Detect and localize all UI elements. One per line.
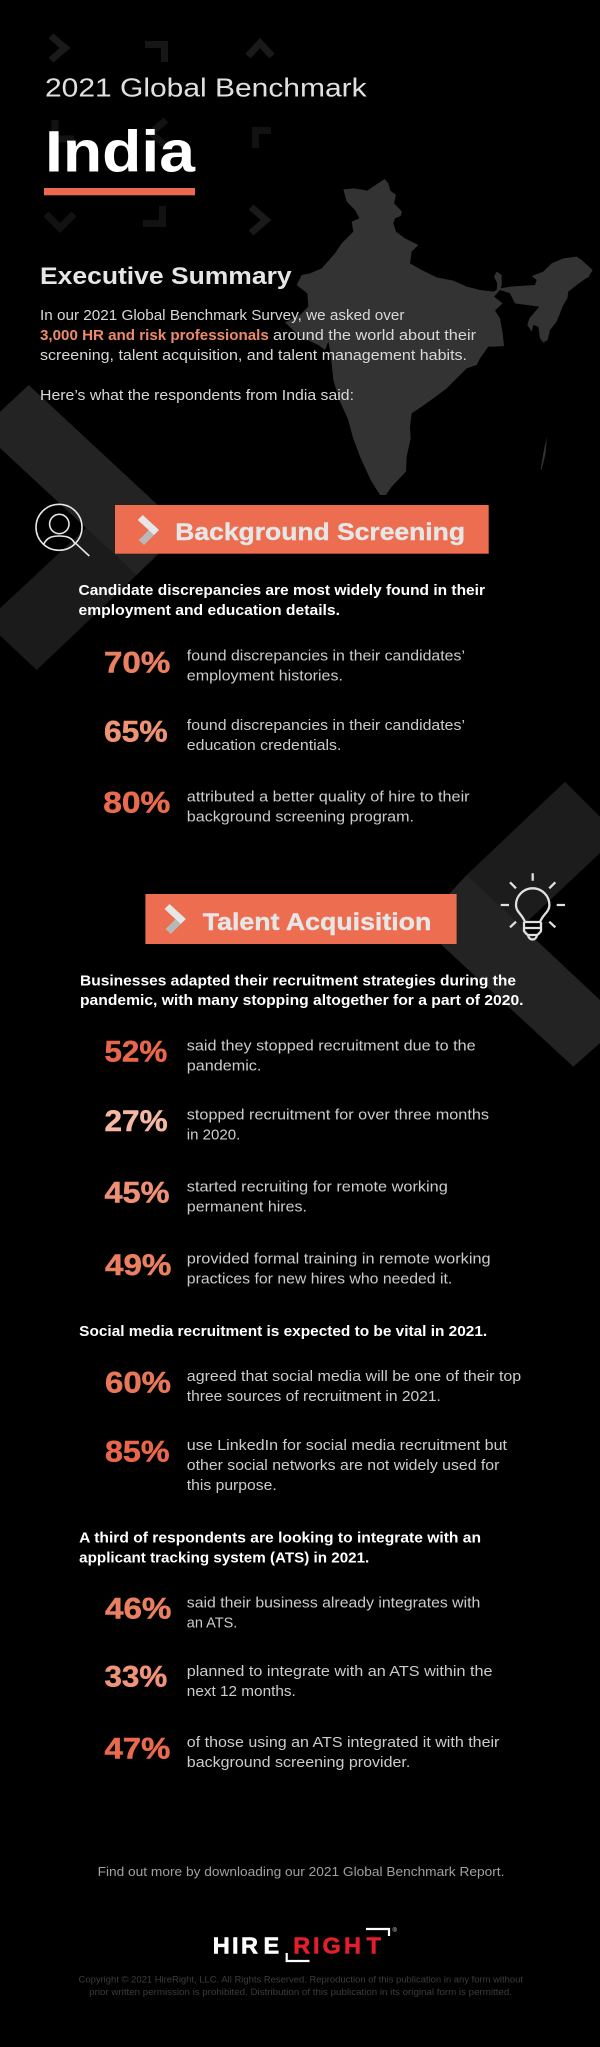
summary paragraph: Here’s what the respondents from India said: [40,387,354,404]
subheading: recruitment strategies: Businesses adapted their recruitment strategies during the [80,973,516,990]
stat: 49% [105,1249,491,1288]
title block [44,73,368,195]
copyright notice: prior written permission is prohibited. Distribution of this publication in its original form is permitted. [89,1987,512,1997]
stat: 60% [105,1367,521,1405]
title: India: India [45,120,196,185]
copyright notice: Copyright © 2021 HireRight, LLC. All Rights Reserved. Reproduction of this publication in any form without [78,1974,524,1984]
stat: 49%: provided formal training in remote working [187,1251,491,1268]
banner: talent acquisition: Talent Acquisition [203,909,431,936]
executive summary [40,263,476,404]
stat: 85% [105,1436,508,1494]
stat: 33%: planned to integrate with an ATS within the [187,1663,493,1680]
stat: 65%: 65% [104,716,168,749]
stat: 70%: found discrepancies in their candidates’ [187,648,465,665]
background decorative bands left [0,385,181,670]
heading: executive summary: Executive Summary [40,263,292,290]
stat: 85%: use LinkedIn for social media recruitment but [187,1437,508,1454]
stat: 46% [105,1592,480,1631]
subheading: recruitment strategies: pandemic, with many stopping altogether for a part of 2020. [80,992,524,1009]
logo: HireRight: HIRE [213,1932,279,1958]
stat: 46%: 46% [105,1592,171,1625]
stat: 52% [104,1036,476,1075]
stat: 52%: pandemic. [187,1058,261,1075]
logo: HireRight: RIGHT [293,1932,382,1958]
stat: 85%: this purpose. [187,1477,277,1494]
stat: 80%: attributed a better quality of hire to their [187,789,470,806]
stat: 27%: in 2020. [187,1126,240,1143]
stat: 33% [104,1661,492,1700]
panel: talent acquisition [79,873,565,1771]
stat: 49%: practices for new hires who needed it. [187,1271,452,1288]
stat: 85%: other social networks are not widely used for [187,1457,499,1474]
summary paragraph: 3,000 HR and risk professionals [40,327,269,344]
summary paragraph: screening, talent acquisition, and talent management habits. [40,347,467,364]
background decorative bands right [420,782,600,1067]
subheading: social media recruitment: Social media recruitment is expected to be vital in 2021. [79,1323,487,1340]
map of India [285,179,593,495]
stat: 47%: 47% [104,1732,170,1765]
stat: 45%: permanent hires. [187,1199,307,1216]
stat: 65%: found discrepancies in their candidates’ [187,717,465,734]
summary paragraph: In our 2021 Global Benchmark Survey, we asked over [40,307,404,324]
copyright notice [78,1974,524,1997]
stat: 80%: 80% [103,787,170,820]
banner: talent acquisition [145,894,457,944]
stat: 49%: 49% [105,1249,171,1282]
summary paragraph [40,307,476,404]
stat: 60%: three sources of recruitment in 2021. [187,1388,441,1405]
stat: 70% [104,646,465,685]
stat: 27%: 27% [104,1105,168,1138]
stat: 33%: next 12 months. [187,1683,296,1700]
stat: 70%: 70% [104,646,170,679]
stat: 27%: stopped recruitment for over three months [187,1106,489,1123]
stat: 45% [104,1176,448,1216]
title: 2021 Global Benchmark: 2021 Global Benchmark [45,73,368,103]
call to action: Find out more by downloading our 2021 Global Benchmark Report. [98,1864,504,1879]
stat: 46%: said their business already integrates with [187,1594,480,1611]
stat: 52%: said they stopped recruitment due to the [187,1038,476,1055]
title underline [44,188,195,195]
subheading: candidate discrepancies: Candidate discrepancies are most widely found in their [78,582,485,599]
subheading: applicant tracking system: A third of respondents are looking to integrate with an [79,1530,481,1547]
stat: 60%: agreed that social media will be one of their top [187,1368,521,1385]
subheading: applicant tracking system [79,1530,481,1567]
stat: 52%: 52% [104,1036,167,1069]
panel: background screening [36,504,489,826]
stat: 85%: 85% [105,1436,170,1469]
banner: background screening [115,505,489,554]
subheading: candidate discrepancies [78,582,485,619]
subheading: applicant tracking system: applicant tracking system (ATS) in 2021. [79,1550,369,1567]
stat: 65%: education credentials. [187,737,341,754]
subheading: recruitment strategies [80,973,524,1009]
stat: 47%: background screening provider. [187,1754,410,1771]
icon: person with magnifier [36,504,89,556]
stat: 60%: 60% [105,1367,171,1400]
icon: light bulb [501,873,565,940]
stat: 45%: started recruiting for remote working [187,1179,448,1196]
stat: 65% [104,716,465,754]
stat: 46%: an ATS. [187,1614,237,1631]
stat: 70%: employment histories. [187,668,343,685]
stat: 80% [103,787,470,826]
summary paragraph: around the world about their [273,327,476,344]
stat: 47%: of those using an ATS integrated it with their [187,1734,499,1751]
logo: HireRight [213,1927,398,1961]
decorative chevrons and corners [46,36,272,233]
stat: 80%: background screening program. [187,809,414,826]
logo: HireRight: ® [392,1927,398,1934]
stat: 47% [104,1732,499,1771]
stat: 45%: 45% [104,1176,170,1209]
subheading: candidate discrepancies: employment and education details. [78,602,340,619]
banner: background screening: Background Screening [175,519,465,546]
stat: 33%: 33% [104,1661,167,1694]
stat: 27% [104,1105,489,1143]
